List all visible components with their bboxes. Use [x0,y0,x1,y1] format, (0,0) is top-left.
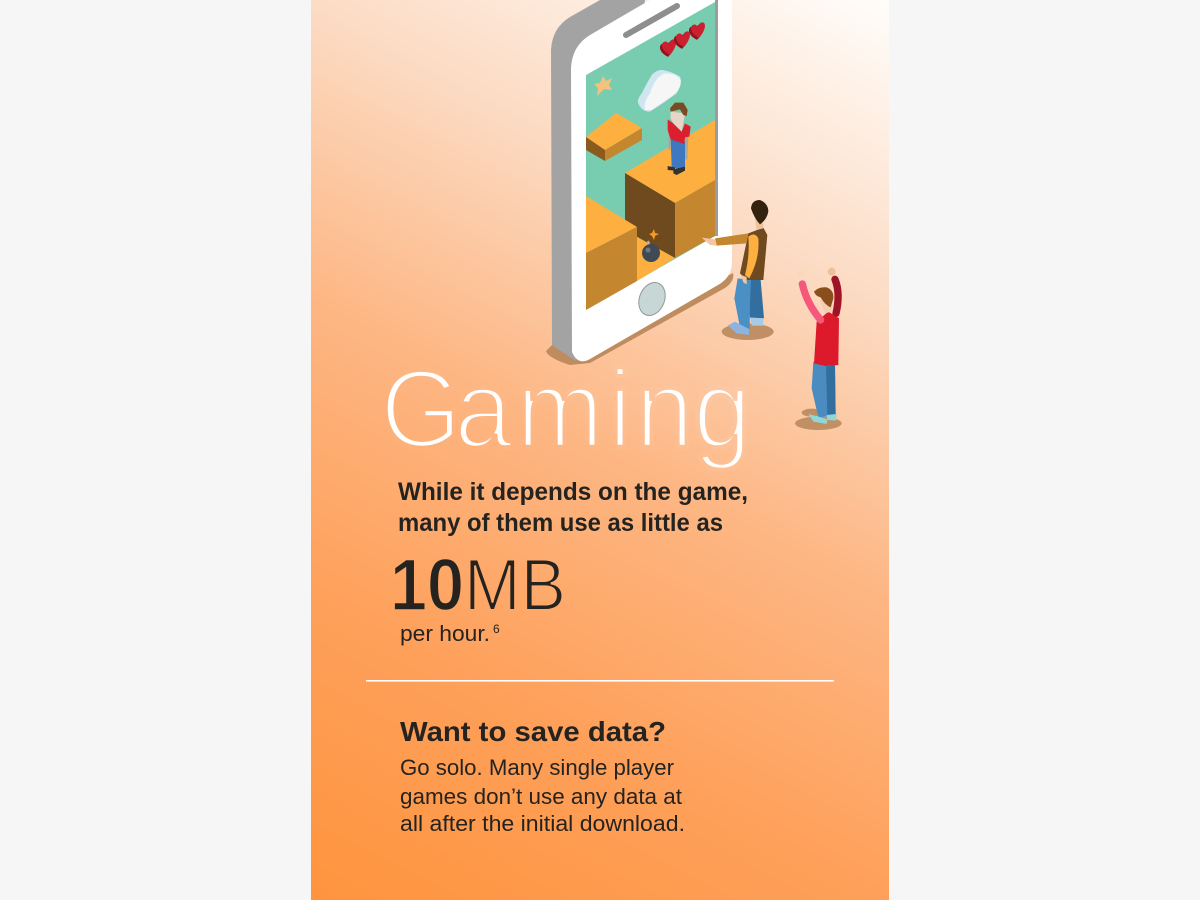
phone body [571,0,732,361]
caption: per hour: per hour. [400,621,490,646]
tip text: Go solo. Many single player [400,755,674,780]
phone shadow [546,273,733,365]
icon: bomb [642,229,660,262]
illustration: boy pointing at the phone [702,200,774,340]
intro text: many of them use as little as [398,509,723,537]
home button [634,279,670,319]
caption: per hour: 6 [493,622,500,636]
game floor [637,237,675,281]
divider [366,680,834,682]
game block: front column [586,196,637,310]
heading: Gaming: Gaming [380,348,751,471]
game character [668,103,691,175]
phone screen [586,0,718,310]
panel: gradient background [311,0,889,900]
icon: cloud [638,70,681,112]
statistic: 10MB: MB [464,545,566,626]
illustration: boy cheering [795,268,842,430]
game block: floating platform [586,113,642,161]
statistic: 10MB [390,545,566,626]
tip text [400,755,685,836]
speaker [626,6,677,35]
illustration: giant phone [546,0,733,365]
subheading: want to save data: Want to save data? [400,716,666,747]
tip text: all after the initial download. [400,811,685,836]
statistic: 10MB: 10 [390,545,464,626]
game block: large column [625,120,715,258]
tip text: games don’t use any data at [400,784,682,809]
intro text [398,478,748,537]
icon: hearts [659,22,707,58]
phone side [551,0,645,361]
intro text: While it depends on the game, [398,478,748,506]
icon: star [594,76,612,96]
